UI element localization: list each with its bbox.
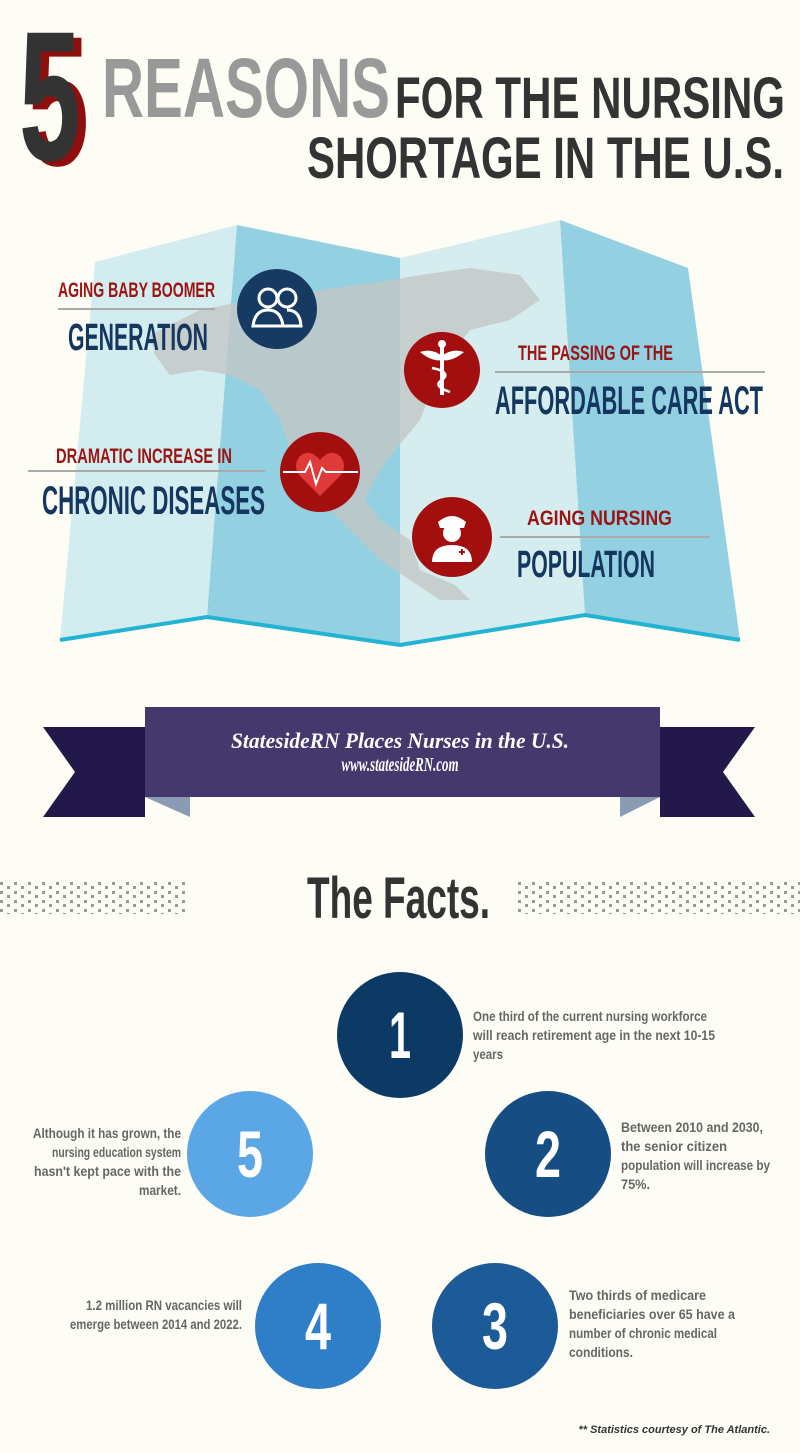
fact 5: hasn't kept pace with the (34, 1163, 181, 1179)
title: 5 (19, 0, 81, 200)
icon: heart (280, 432, 360, 512)
fact 1: will reach retirement age in the next 10-15 (472, 1027, 715, 1043)
reason: generation: GENERATION (68, 317, 208, 359)
fact 3: beneficiaries over 65 have a (569, 1306, 735, 1322)
fact 3: Two thirds of medicare (569, 1287, 706, 1303)
reason: generation (58, 279, 215, 359)
fact 1: years (473, 1046, 503, 1062)
icon: nurse (412, 497, 492, 577)
icon: people (237, 269, 317, 349)
fact 3: 3 (482, 1289, 508, 1363)
facts heading: The Facts. (307, 866, 490, 931)
fact 3: number of chronic medical (569, 1325, 717, 1341)
fact 2 (485, 1091, 770, 1217)
fact 4 (70, 1263, 381, 1389)
fact 2: 2 (535, 1117, 561, 1191)
title: 5 (27, 0, 89, 205)
fact 1 (337, 972, 715, 1098)
fact 3 (432, 1263, 735, 1389)
fact 5: 5 (237, 1117, 263, 1191)
reason: chronic (28, 445, 265, 523)
facts heading (0, 866, 800, 931)
banner: StatesideRN Places Nurses in the U.S. (231, 728, 569, 753)
reason: generation: AGING BABY BOOMER (58, 279, 215, 302)
reason: chronic: DRAMATIC INCREASE IN (56, 445, 232, 468)
fact 4: 1.2 million RN vacancies will (86, 1297, 242, 1313)
fact 4: 4 (305, 1289, 331, 1363)
fact 2: 75%. (621, 1176, 650, 1192)
fact 2: the senior citizen (621, 1138, 727, 1154)
title (19, 0, 785, 205)
banner (43, 707, 755, 817)
fact 5: nursing education system (52, 1144, 181, 1160)
reason: population: AGING NURSING (527, 507, 672, 530)
footnote: ** Statistics courtesy of The Atlantic. (578, 1424, 770, 1436)
fact 1: One third of the current nursing workforce (473, 1008, 707, 1024)
reason: ACA: THE PASSING OF THE (518, 342, 673, 365)
fact 5: market. (139, 1182, 181, 1198)
icon: caduceus (404, 332, 480, 408)
map (60, 220, 740, 645)
reason: population (500, 507, 710, 586)
fact 3: conditions. (569, 1344, 633, 1360)
fact 5: Although it has grown, the (33, 1125, 181, 1141)
fact 2: population will increase by (621, 1157, 770, 1173)
reason: chronic: CHRONIC DISEASES (42, 479, 265, 523)
continent (150, 268, 540, 600)
title: REASONS (102, 41, 390, 135)
fact 1: 1 (389, 998, 411, 1072)
reason: population: POPULATION (517, 544, 655, 586)
reason: ACA (495, 342, 765, 423)
fact 2: Between 2010 and 2030, (621, 1119, 763, 1135)
fact 4: emerge between 2014 and 2022. (70, 1316, 242, 1332)
fact 5 (33, 1091, 313, 1217)
banner: www.statesideRN.com (342, 754, 458, 776)
